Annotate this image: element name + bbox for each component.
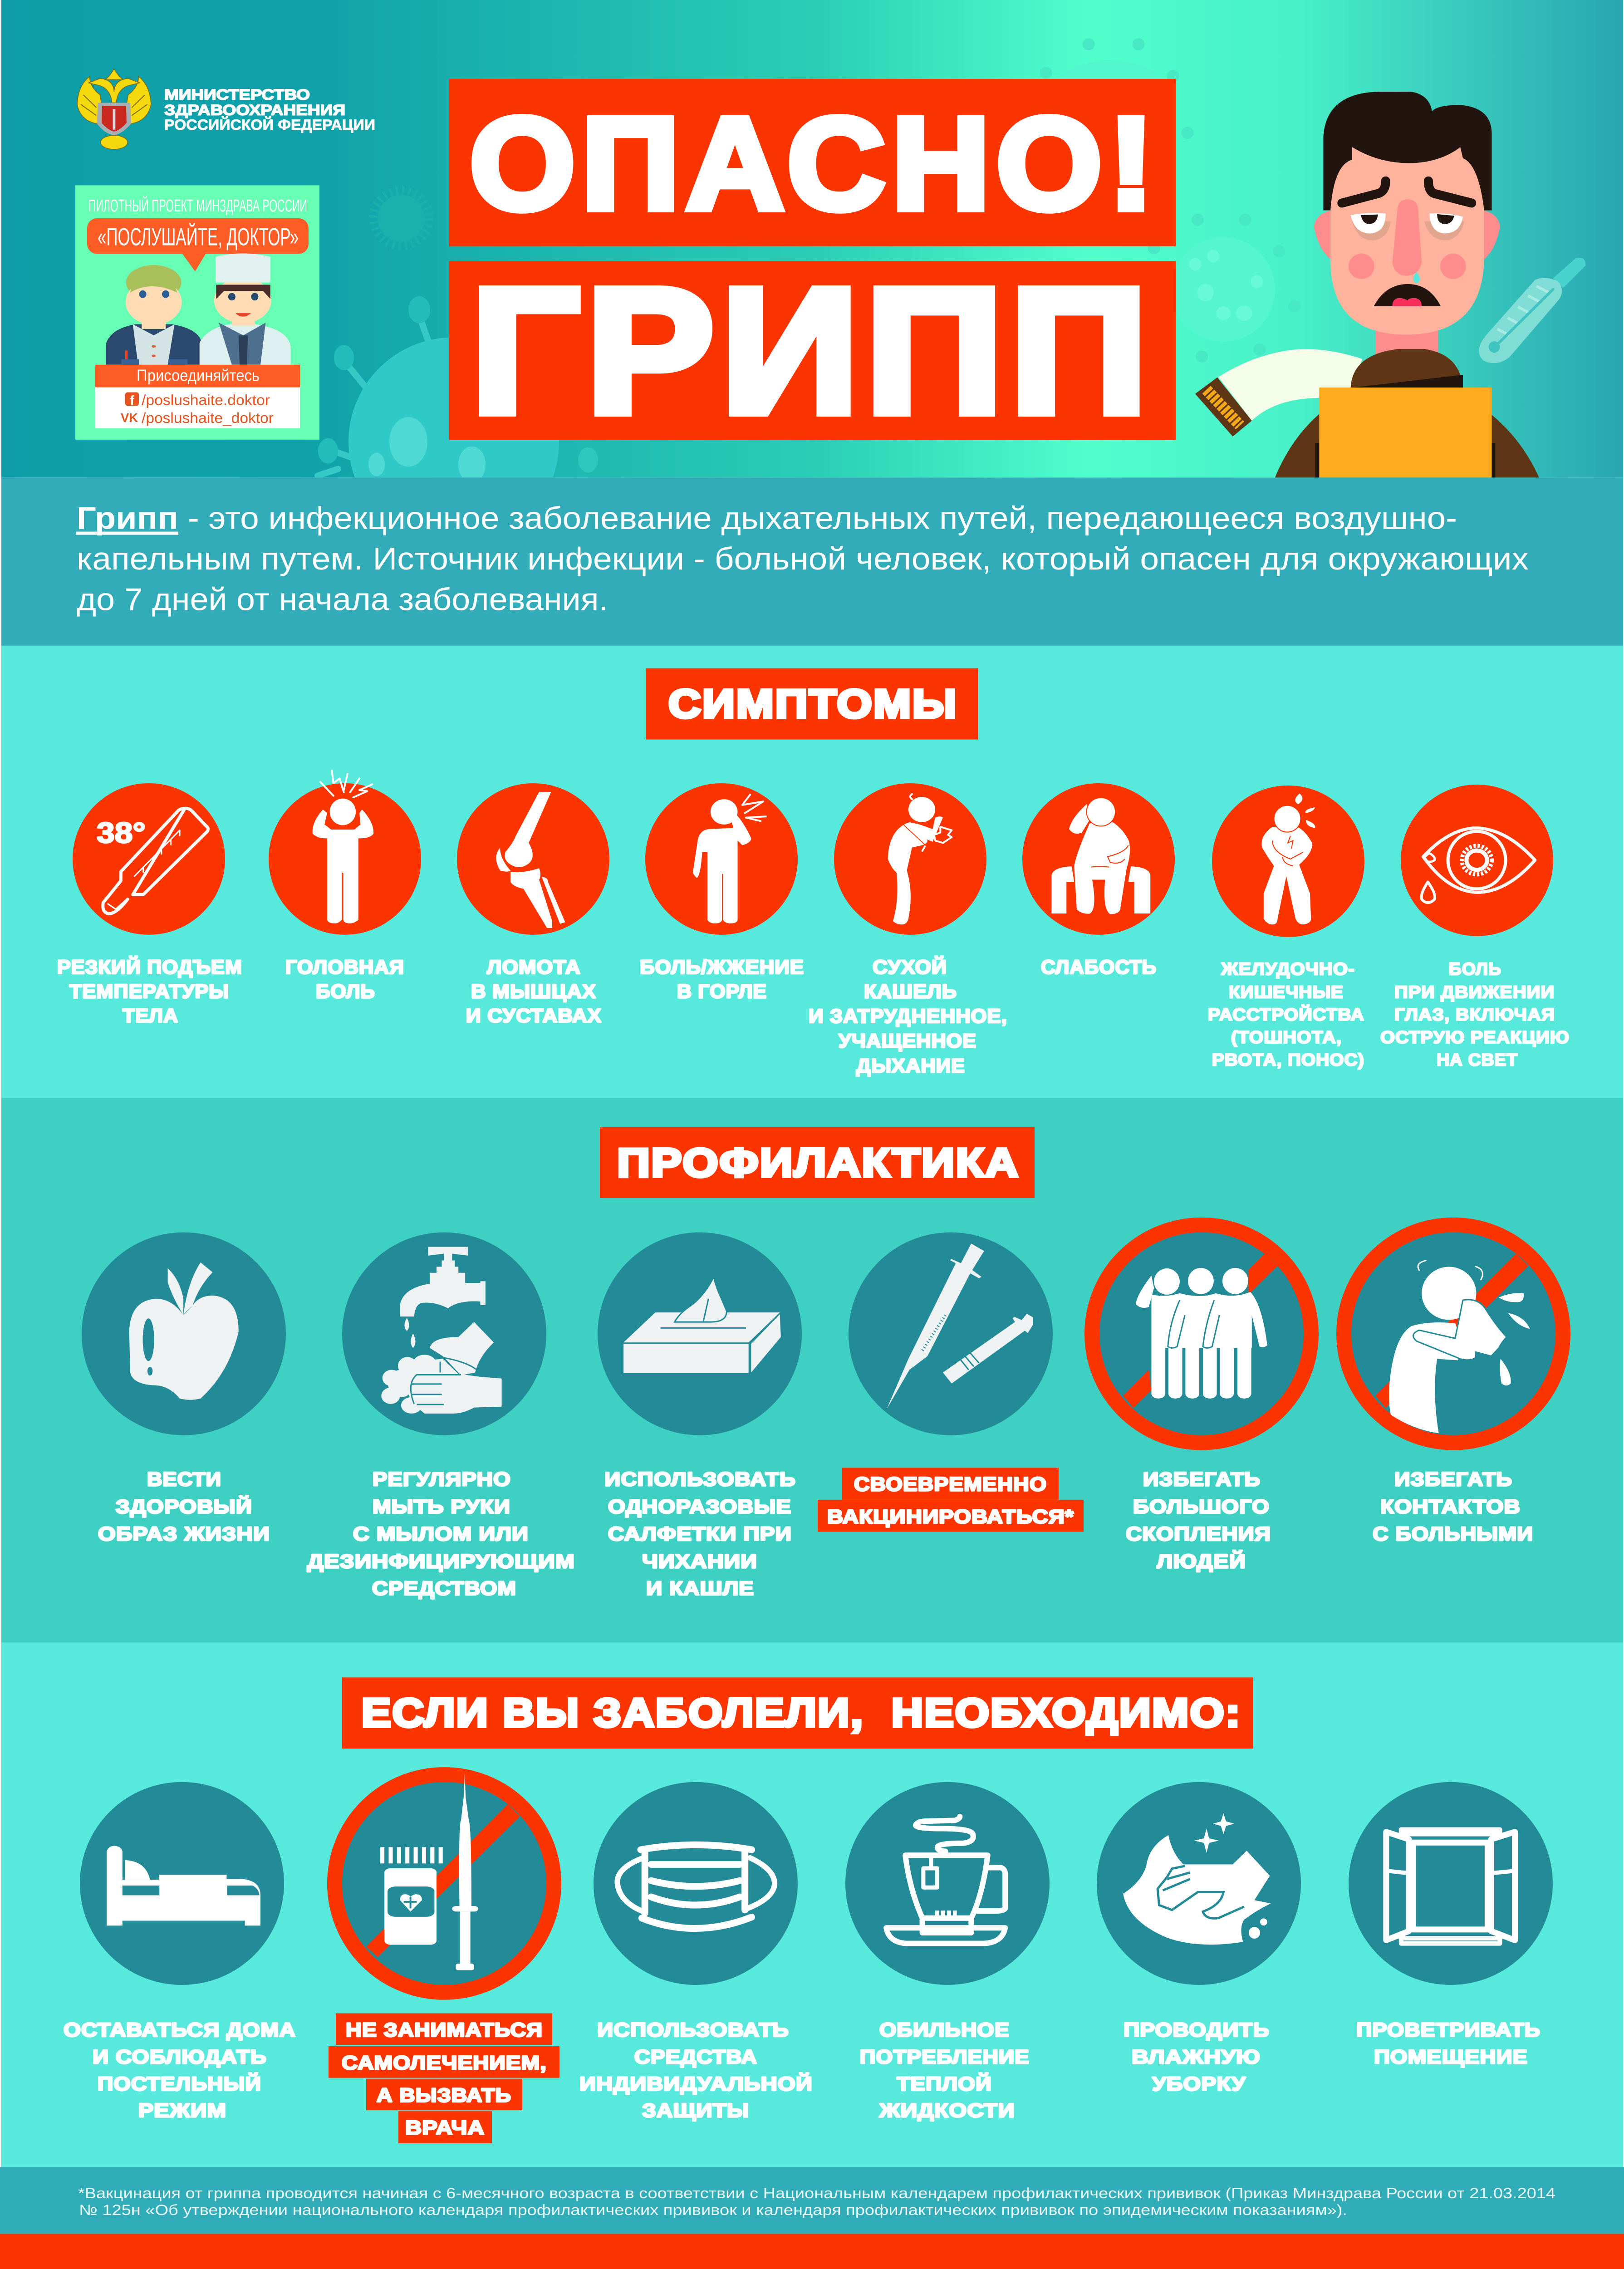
prevention: tissues — [598, 1233, 802, 1599]
action: use masks: ИСПОЛЬЗОВАТЬ — [597, 2019, 789, 2041]
symptom: gastrointestinal: ЖЕЛУДОЧНО- — [1221, 960, 1355, 979]
red tag: call a doctor: А ВЫЗВАТЬ — [377, 2084, 511, 2106]
red tag: vaccinate — [818, 1468, 1084, 1532]
symptom: dry cough — [809, 783, 1007, 1077]
icon: faded thermometer — [1479, 258, 1585, 363]
panel: project card — [75, 185, 319, 440]
symptom: gastrointestinal — [1208, 786, 1364, 1070]
illustration: patient and doctor — [106, 253, 291, 365]
action: wet cleaning: ПРОВОДИТЬ — [1124, 2019, 1270, 2041]
heading: symptoms: СИМПТОМЫ — [668, 681, 958, 726]
red tag: call a doctor — [329, 2014, 559, 2143]
prevention: avoid sick contacts: ИЗБЕГАТЬ — [1394, 1468, 1512, 1490]
action: ventilate: ПОМЕЩЕНИЕ — [1374, 2046, 1528, 2068]
red tag: vaccinate: СВОЕВРЕМЕННО — [854, 1473, 1047, 1495]
action: warm drinks — [845, 1782, 1050, 2122]
symptom: fever: РЕЗКИЙ ПОДЪЕМ — [57, 956, 242, 978]
symptom: dry cough: ДЫХАНИЕ — [856, 1055, 965, 1077]
prevention: avoid sick contacts — [1344, 1225, 1563, 1545]
red tag: call a doctor: ВРАЧА — [405, 2117, 485, 2139]
prevention: wash hands — [307, 1233, 575, 1599]
prevention: tissues: ЧИХАНИИ — [642, 1551, 757, 1572]
prevention: wash hands: ДЕЗИНФИЦИРУЮЩИМ — [307, 1551, 575, 1572]
logo: ministry coat of arms — [77, 69, 151, 149]
panel: hero header — [1, 0, 1623, 477]
symptom: gastrointestinal: КИШЕЧНЫЕ — [1229, 983, 1344, 1002]
action: stay in bed: ОСТАВАТЬСЯ ДОМА — [64, 2019, 296, 2041]
title: ОПАСНО!: ОПАСНО! — [470, 91, 1160, 237]
action: warm drinks: ПОТРЕБЛЕНИЕ — [860, 2046, 1030, 2068]
social links: f — [130, 393, 135, 408]
prevention: healthy lifestyle: ВЕСТИ — [147, 1468, 221, 1490]
action: warm drinks: ЖИДКОСТИ — [879, 2100, 1015, 2122]
symptom: fever: ТЕЛА — [123, 1005, 178, 1027]
symptom: joint pain: В МЫШЦАХ — [471, 981, 596, 1002]
panel: prevention — [1, 1098, 1623, 1643]
action: use masks: ИНДИВИДУАЛЬНОЙ — [579, 2073, 813, 2095]
panel: symptoms — [1, 646, 1623, 1098]
symptom: eye pain: НА СВЕТ — [1437, 1051, 1518, 1070]
symptom: gastrointestinal: РАССТРОЙСТВА — [1208, 1004, 1364, 1025]
join banner — [95, 365, 300, 388]
social links: /poslushaite.doktor — [142, 391, 270, 408]
prevention: healthy lifestyle: ОБРАЗ ЖИЗНИ — [98, 1523, 270, 1545]
panel: intro definition — [1, 477, 1623, 646]
prevention: tissues: ИСПОЛЬЗОВАТЬ — [604, 1468, 796, 1490]
join banner: Присоединяйтесь — [137, 367, 260, 385]
prevention: avoid sick contacts: С БОЛЬНЫМИ — [1373, 1523, 1533, 1545]
social links: VK — [121, 411, 138, 425]
speech bubble — [87, 218, 309, 271]
speech bubble: «ПОСЛУШАЙТЕ, ДОКТОР» — [98, 222, 299, 251]
symptom: eye pain: БОЛЬ — [1449, 960, 1501, 979]
action: stay in bed: ПОСТЕЛЬНЫЙ — [98, 2073, 261, 2095]
symptom: weakness: СЛАБОСТЬ — [1041, 956, 1157, 978]
ministry name: ЗДРАВООХРАНЕНИЯ — [164, 101, 345, 118]
action: use masks: ЗАЩИТЫ — [642, 2100, 749, 2122]
heading: prevention: ПРОФИЛАКТИКА — [617, 1140, 1020, 1185]
prevention: avoid sick contacts: КОНТАКТОВ — [1380, 1496, 1521, 1518]
symptom: sore throat: В ГОРЛЕ — [677, 981, 767, 1002]
action: wet cleaning — [1097, 1782, 1301, 2095]
prevention: avoid crowds — [1092, 1225, 1311, 1572]
prevention: tissues: САЛФЕТКИ ПРИ — [608, 1523, 792, 1545]
action: use masks — [579, 1782, 813, 2122]
symptom: gastrointestinal: (ТОШНОТА, — [1231, 1028, 1342, 1047]
panel: intro definition: Грипп — [77, 501, 178, 535]
symptom: weakness — [1022, 783, 1175, 978]
symptom: eye pain — [1380, 785, 1570, 1070]
symptom: headache: БОЛЬ — [316, 981, 375, 1002]
bottom red bar — [0, 2234, 1624, 2269]
prevention: wash hands: МЫТЬ РУКИ — [373, 1496, 510, 1518]
red tag: call a doctor: НЕ ЗАНИМАТЬСЯ — [346, 2019, 543, 2041]
title: ГРИПП: ГРИПП — [471, 251, 1154, 450]
action: ventilate: ПРОВЕТРИВАТЬ — [1356, 2019, 1541, 2041]
action: stay in bed — [64, 1782, 296, 2122]
heading: symptoms — [646, 668, 978, 740]
prevention: wash hands: С МЫЛОМ ИЛИ — [353, 1523, 529, 1545]
action: stay in bed: РЕЖИМ — [138, 2100, 226, 2122]
action: no self-treatment — [329, 1773, 559, 2143]
prevention: wash hands: СРЕДСТВОМ — [372, 1578, 516, 1599]
symptom: dry cough: УЧАЩЕННОЕ — [839, 1030, 976, 1052]
social links: /poslushaite_doktor — [142, 409, 274, 426]
symptom: joint pain: ЛОМОТА — [487, 956, 581, 978]
red tag: call a doctor: САМОЛЕЧЕНИЕМ, — [342, 2052, 547, 2074]
prevention: vaccination — [818, 1233, 1084, 1532]
symptom: joint pain: И СУСТАВАХ — [466, 1005, 602, 1027]
prevention: avoid crowds: СКОПЛЕНИЯ — [1126, 1523, 1271, 1545]
symptom: fever — [57, 783, 242, 1027]
action: ventilate — [1349, 1782, 1553, 2068]
symptom: dry cough: КАШЕЛЬ — [864, 981, 957, 1002]
ministry name: МИНИСТЕРСТВО — [164, 86, 310, 103]
symptom: fever: 38° — [97, 816, 146, 849]
symptom: joint pain — [457, 783, 609, 1027]
prevention: avoid crowds: ЛЮДЕЙ — [1157, 1550, 1246, 1572]
symptom: headache — [269, 771, 421, 1002]
footer note — [0, 2167, 1624, 2234]
illustration: sick man — [1195, 92, 1539, 478]
prevention: tissues: И КАШЛЕ — [646, 1578, 754, 1599]
prevention: avoid crowds: БОЛЬШОГО — [1133, 1496, 1270, 1518]
panel: project card: ПИЛОТНЫЙ ПРОЕКТ МИНЗДРАВА РОССИИ — [88, 195, 307, 216]
action: use masks: СРЕДСТВА — [634, 2046, 757, 2068]
action: wet cleaning: УБОРКУ — [1152, 2073, 1246, 2095]
action: warm drinks: ТЕПЛОЙ — [897, 2073, 992, 2095]
red tag: vaccinate: ВАКЦИНИРОВАТЬСЯ* — [827, 1506, 1074, 1527]
prevention: avoid crowds: ИЗБЕГАТЬ — [1143, 1468, 1261, 1490]
symptom: eye pain: ПРИ ДВИЖЕНИИ — [1394, 983, 1555, 1002]
prevention: healthy lifestyle — [82, 1233, 286, 1545]
heading: if sick: ЕСЛИ ВЫ ЗАБОЛЕЛИ, НЕОБХОДИМО: — [362, 1690, 1241, 1735]
action: warm drinks: ОБИЛЬНОЕ — [879, 2019, 1010, 2041]
heading: prevention — [600, 1127, 1035, 1198]
panel: intro definition: - это инфекционное заболевание дыхательных путей, передающееся воздушно- — [188, 501, 1457, 535]
symptom: fever: ТЕМПЕРАТУРЫ — [69, 981, 229, 1002]
prevention: tissues: ОДНОРАЗОВЫЕ — [608, 1496, 791, 1518]
symptom: eye pain: ГЛАЗ, ВКЛЮЧАЯ — [1394, 1006, 1555, 1025]
action: stay in bed: И СОБЛЮДАТЬ — [93, 2046, 267, 2068]
symptom: gastrointestinal: РВОТА, ПОНОС) — [1212, 1051, 1364, 1070]
background viruses — [318, 38, 1301, 546]
panel: intro definition: капельным путем. Источник инфекции - больной человек, который опасен для окружающих — [77, 541, 1529, 576]
panel: intro definition: до 7 дней от начала заболевания. — [77, 582, 608, 617]
ministry name — [164, 86, 375, 133]
ministry name: РОССИЙСКОЙ ФЕДЕРАЦИИ — [164, 116, 375, 133]
heading: if sick — [342, 1677, 1253, 1748]
symptom: sore throat — [640, 783, 804, 1002]
panel: if you are sick — [1, 1643, 1623, 2167]
footer note: № 125н «Об утверждении национального календаря профилактических прививок и календаря профилактических прививок по эпидемическим показаниям»). — [79, 2201, 1347, 2218]
footer note: *Вакцинация от гриппа проводится начиная с 6-месячного возраста в соответствии с Национальным календарем профилактических прививок (Приказ Минздрава России от 21.03.2014 — [78, 2185, 1555, 2201]
prevention: wash hands: РЕГУЛЯРНО — [373, 1468, 511, 1490]
symptom: dry cough: И ЗАТРУДНЕННОЕ, — [809, 1006, 1007, 1027]
prevention: healthy lifestyle: ЗДОРОВЫЙ — [116, 1496, 252, 1518]
symptom: dry cough: СУХОЙ — [873, 956, 947, 978]
symptom: eye pain: ОСТРУЮ РЕАКЦИЮ — [1380, 1028, 1570, 1047]
symptom: sore throat: БОЛЬ/ЖЖЕНИЕ — [640, 956, 804, 978]
social links — [95, 388, 300, 428]
symptom: headache: ГОЛОВНАЯ — [285, 956, 404, 978]
action: wet cleaning: ВЛАЖНУЮ — [1132, 2046, 1261, 2068]
